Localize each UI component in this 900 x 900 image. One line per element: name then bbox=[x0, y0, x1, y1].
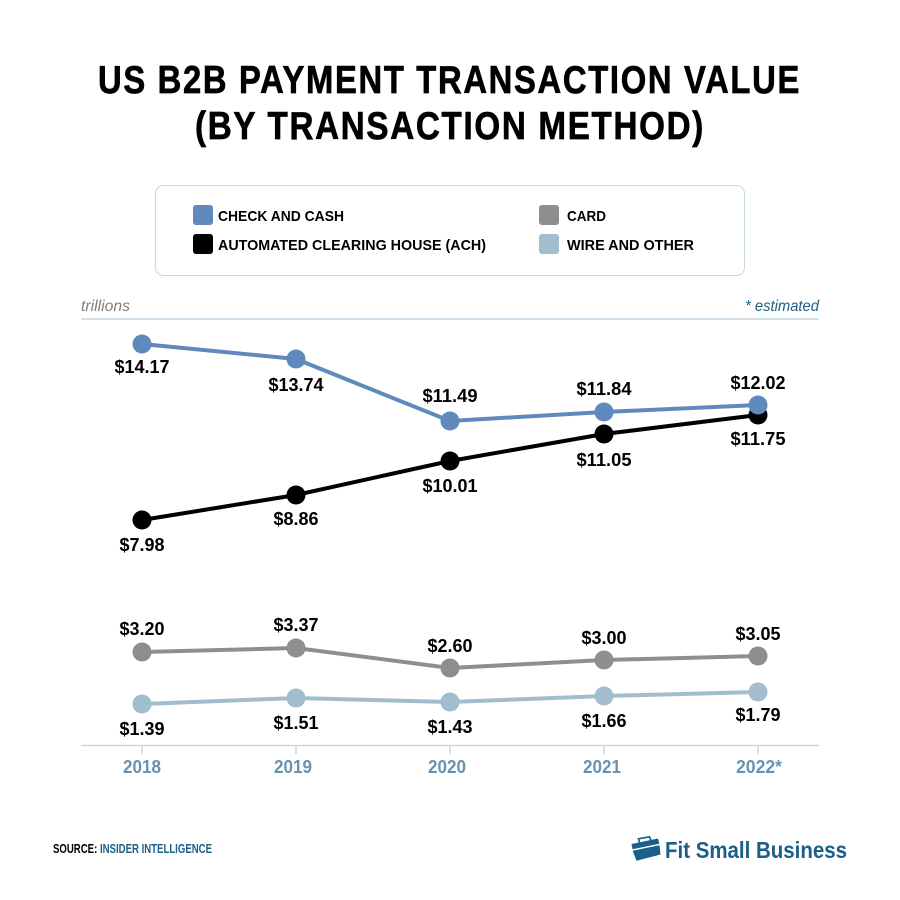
title: (BY TRANSACTION METHOD) bbox=[195, 105, 705, 148]
x axis: 2019 bbox=[274, 757, 312, 777]
legend item: check and cash: CHECK AND CASH bbox=[218, 208, 344, 225]
series: check and cash: $11.49 bbox=[422, 386, 478, 406]
series: check and cash: $13.74 bbox=[268, 375, 324, 395]
legend item: check and cash bbox=[193, 205, 344, 225]
logo: Fit Small Business: Fit Small Business bbox=[665, 837, 847, 863]
series: card: $3.37 bbox=[274, 615, 318, 635]
note: estimated: * estimated bbox=[745, 298, 820, 315]
series: card bbox=[120, 615, 780, 678]
series: card: $3.05 bbox=[736, 624, 780, 644]
x axis: 2020 bbox=[428, 757, 466, 777]
series: card: $3.20 bbox=[120, 619, 164, 639]
x axis: 2021 bbox=[583, 757, 621, 777]
legend item: wire and other bbox=[539, 234, 694, 254]
series: card: $3.00 bbox=[582, 628, 626, 648]
series: card: $2.60 bbox=[428, 636, 472, 656]
series: wire and other: $1.51 bbox=[274, 713, 318, 733]
legend item: card bbox=[539, 205, 606, 225]
series: ACH: $10.01 bbox=[422, 476, 478, 496]
series: ACH: $7.98 bbox=[120, 535, 164, 555]
series: wire and other: $1.39 bbox=[120, 719, 164, 739]
legend item: wire and other: WIRE AND OTHER bbox=[567, 237, 694, 254]
series: check and cash bbox=[114, 334, 786, 430]
series: check and cash: $12.02 bbox=[730, 373, 786, 393]
unit label: trillions: trillions bbox=[81, 298, 130, 315]
series: check and cash: $14.17 bbox=[114, 357, 170, 377]
series: wire and other: $1.66 bbox=[582, 711, 626, 731]
series: wire and other bbox=[120, 682, 780, 739]
legend item: card: CARD bbox=[567, 208, 606, 225]
icon: briefcase bbox=[632, 837, 660, 861]
series: ACH bbox=[120, 406, 786, 555]
x axis: 2018 bbox=[123, 757, 161, 777]
legend item: ACH: AUTOMATED CLEARING HOUSE (ACH) bbox=[218, 237, 486, 254]
series: wire and other: $1.79 bbox=[736, 705, 780, 725]
source: SOURCE: INSIDER INTELLIGENCE bbox=[53, 842, 212, 856]
x axis: 2022* bbox=[736, 757, 782, 777]
point: check and cash 2022 bbox=[748, 396, 768, 414]
series: check and cash: $11.84 bbox=[576, 379, 632, 399]
line chart bbox=[114, 334, 786, 739]
series: wire and other: $1.43 bbox=[428, 717, 472, 737]
series: ACH: $11.05 bbox=[576, 450, 632, 470]
series: ACH: $11.75 bbox=[730, 429, 786, 449]
panel: legend bbox=[156, 186, 744, 276]
series: ACH: $8.86 bbox=[274, 509, 318, 529]
x axis bbox=[81, 745, 819, 777]
title bbox=[98, 59, 801, 148]
